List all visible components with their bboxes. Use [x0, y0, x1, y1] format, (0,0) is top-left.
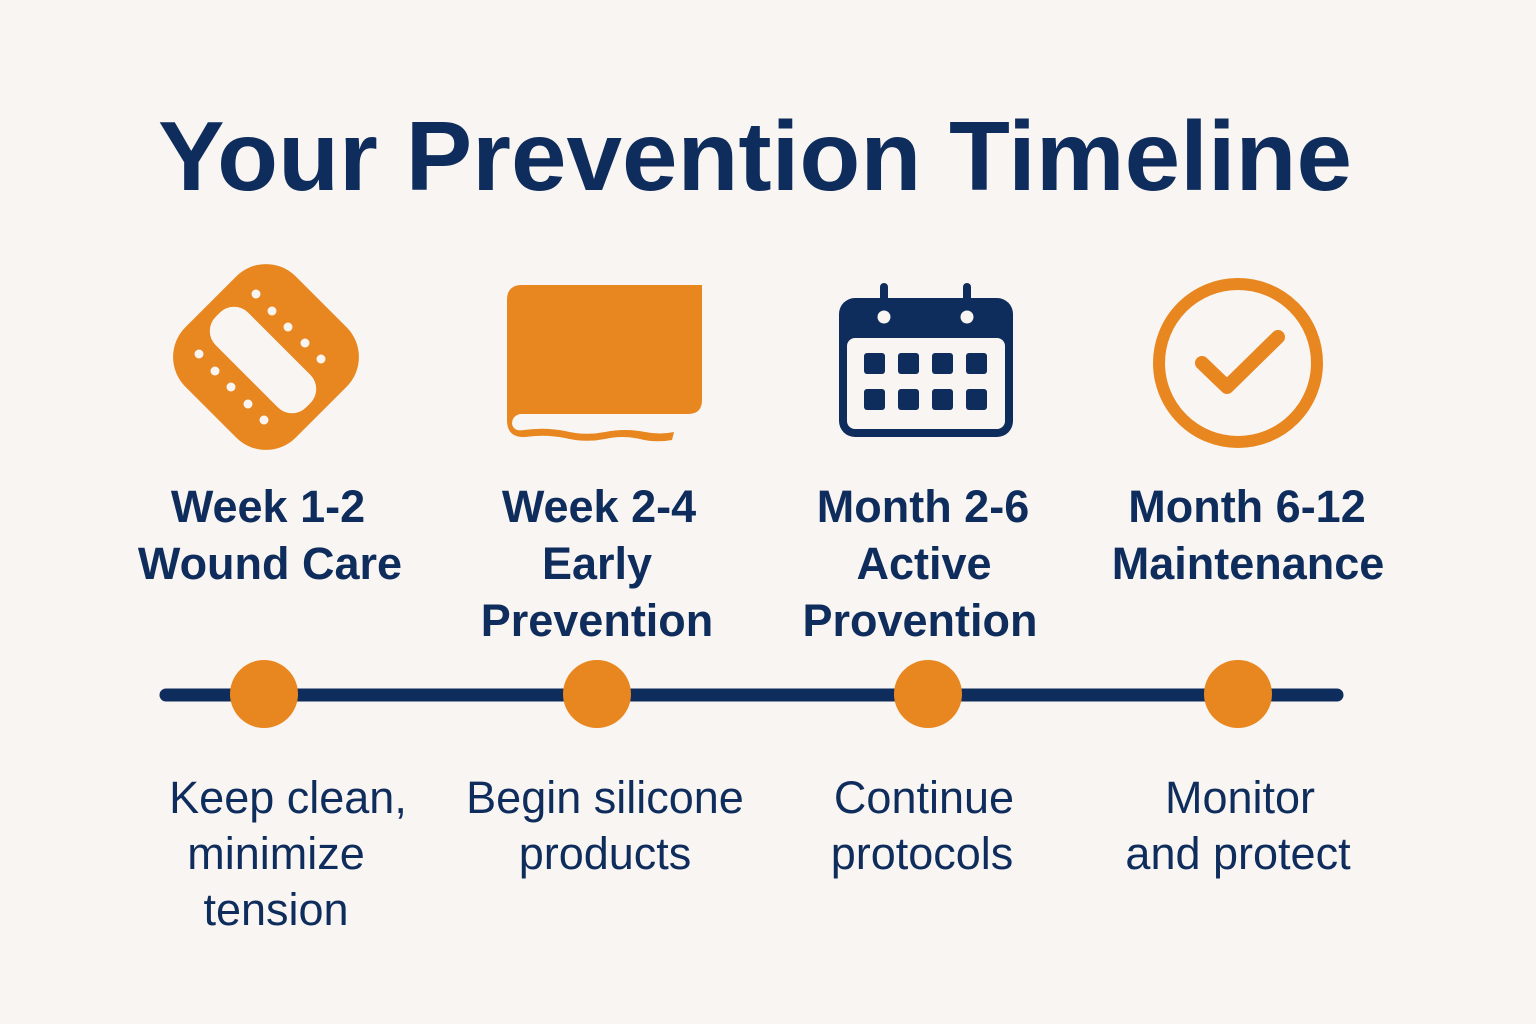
text: step 4: and protect — [1125, 828, 1351, 879]
heading: month 2-6: Active — [856, 538, 992, 589]
heading: month 2-6: Month 2-6 — [817, 481, 1029, 532]
heading: month 2-6 — [802, 481, 1038, 646]
heading: week 1-2: Wound Care — [138, 538, 402, 589]
heading: month 6-12: Maintenance — [1112, 538, 1384, 589]
text: step 2: products — [519, 828, 691, 879]
heading: week 2-4: Prevention — [481, 595, 713, 646]
heading: week 1-2: Week 1-2 — [171, 481, 365, 532]
text: step 1: tension — [203, 884, 349, 935]
heading: month 2-6: Provention — [802, 595, 1038, 646]
text: step 1: Keep clean, — [169, 772, 407, 823]
text: step 4: Monitor — [1165, 772, 1315, 823]
text: step 3: protocols — [831, 828, 1013, 879]
heading: week 2-4: Week 2-4 — [502, 481, 696, 532]
heading: week 1-2 — [138, 481, 402, 589]
text: step 2: Begin silicone — [466, 772, 744, 823]
icon: check circle — [1159, 284, 1317, 442]
text: step 3 — [831, 772, 1014, 879]
title: Your Prevention Timeline — [158, 101, 1352, 211]
heading: week 2-4 — [481, 481, 713, 646]
icon: calendar — [839, 283, 1013, 437]
text: step 4 — [1125, 772, 1351, 879]
text: step 3: Continue — [834, 772, 1014, 823]
text: step 1 — [169, 772, 407, 935]
text: step 1: minimize — [187, 828, 365, 879]
heading: month 6-12: Month 6-12 — [1128, 481, 1366, 532]
icon: book — [507, 285, 702, 441]
timeline — [166, 660, 1337, 728]
icon: bandage — [156, 247, 376, 467]
heading: week 2-4: Early — [542, 538, 652, 589]
heading: month 6-12 — [1112, 481, 1384, 589]
text: step 2 — [466, 772, 744, 879]
